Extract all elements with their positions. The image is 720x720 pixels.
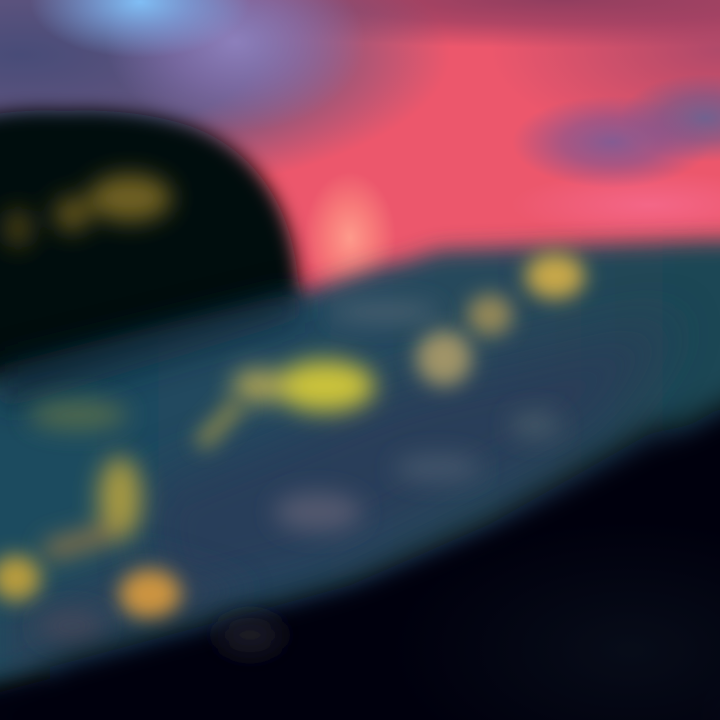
dome yellow lights <box>4 174 172 248</box>
faint foreground labels <box>218 617 282 653</box>
dark dome silhouette <box>0 110 310 420</box>
teal map slab <box>0 240 720 685</box>
dark backing under the map <box>0 320 720 720</box>
route segment lower left <box>45 456 142 552</box>
marker middle <box>416 330 472 386</box>
faint map labels <box>28 302 561 642</box>
bottom left map tint <box>0 555 250 680</box>
central highlighted marker <box>232 360 375 412</box>
marker top right <box>525 253 585 299</box>
darker blue lower map area <box>140 320 680 610</box>
marker left <box>0 555 41 601</box>
dark lower foreground edge <box>0 408 720 720</box>
marker upper middle <box>467 294 513 336</box>
route line <box>200 402 240 445</box>
marker orange <box>119 569 181 619</box>
darker shadow under dome <box>0 290 300 410</box>
